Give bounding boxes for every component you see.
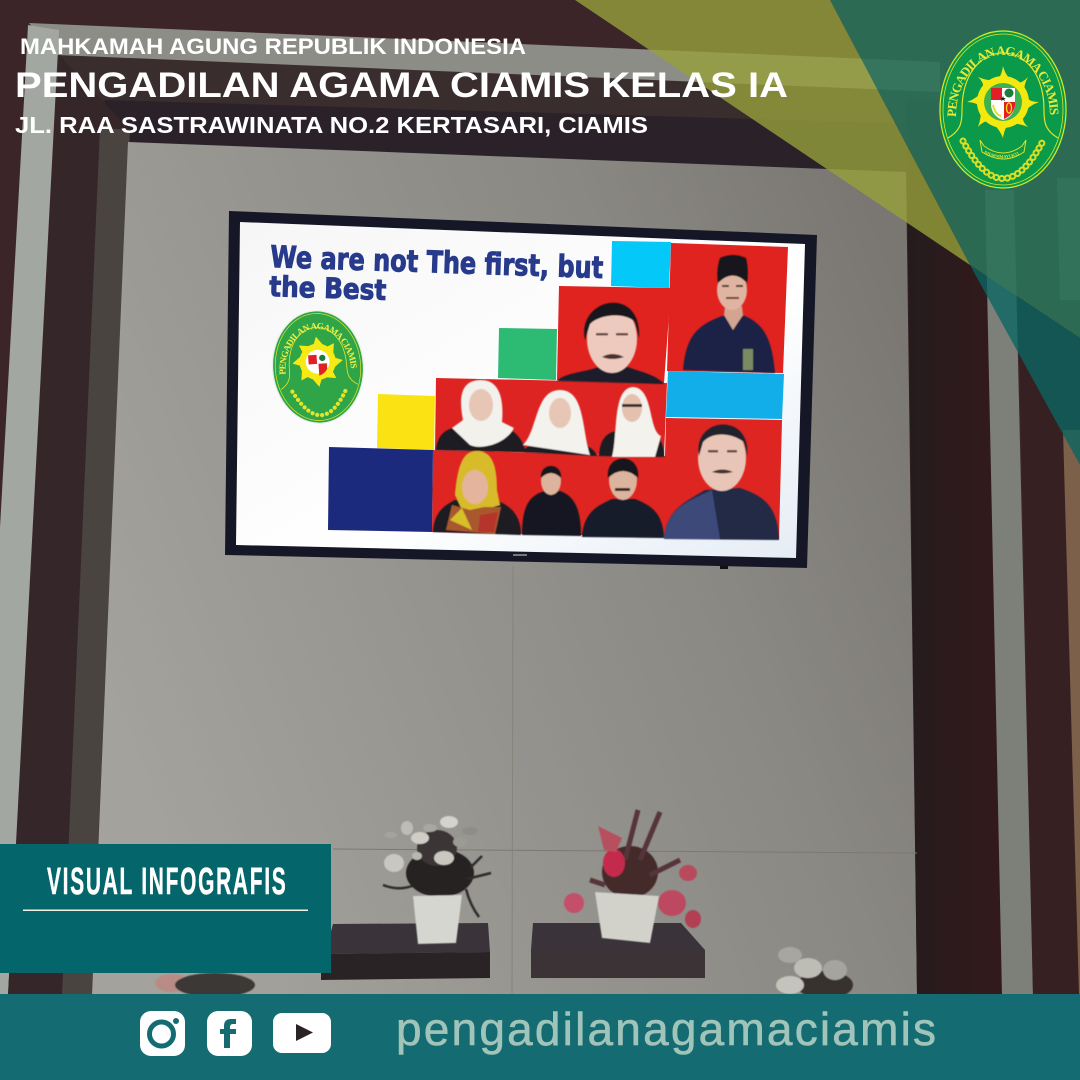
portrait: woman 3	[599, 387, 664, 457]
logo sun	[967, 66, 1039, 138]
portrait: man with cap	[683, 255, 775, 373]
icon: youtube	[273, 1013, 331, 1053]
plant: white flowers in pot on left shelf	[383, 816, 491, 944]
shelf left	[321, 923, 490, 980]
logo: Pengadilan Agama Ciamis: DHARMMAYUKTI	[984, 150, 1020, 158]
footer handle text: pengadilanagamaciamis	[396, 1003, 936, 1055]
slide heading: the Best	[269, 270, 387, 307]
header line 2: title: PENGADILAN AGAMA CIAMIS KELAS IA	[15, 66, 788, 105]
slide heading: We are not The first, but	[270, 240, 604, 286]
header line 1: MAHKAMAH AGUNG REPUBLIK INDONESIA	[20, 34, 526, 59]
portrait: woman in yellow hijab	[433, 451, 521, 535]
logo ribbon	[980, 140, 1026, 159]
icon: instagram	[140, 1011, 185, 1056]
colour blocks	[328, 241, 788, 539]
logo wreath	[963, 141, 1043, 178]
icon: facebook	[207, 1011, 252, 1056]
plant: flower bottom left	[155, 973, 255, 997]
logo: Pengadilan Agama Ciamis	[939, 30, 1067, 189]
portrait: man 2 row 3	[522, 466, 581, 536]
portrait: man 3 row 3	[582, 458, 664, 538]
shelf right	[531, 923, 705, 978]
panel heading: VISUAL INFOGRAFIS	[47, 861, 286, 903]
portrait: large man in blue shirt	[664, 424, 779, 540]
television	[225, 211, 817, 569]
header text	[15, 34, 788, 138]
plant: pink flowers in pot on right shelf	[564, 810, 701, 943]
logo on screen: PENGADILAN AGAMA CIAMIS	[279, 323, 357, 375]
portrait: woman 1	[436, 380, 526, 452]
plant: white flowers bottom right	[776, 947, 853, 999]
staff portraits	[433, 255, 779, 540]
logo on screen	[272, 310, 364, 424]
logo ring text: PENGADILAN AGAMA CIAMIS	[947, 46, 1058, 117]
portrait: woman 2	[523, 390, 597, 456]
slide heading	[269, 240, 604, 314]
header line 3: address: JL. RAA SASTRAWINATA NO.2 KERTASARI, CIAMIS	[15, 112, 648, 138]
panel: visual infografis	[0, 844, 331, 973]
olive triangle	[575, 0, 970, 265]
logo shield	[991, 88, 1015, 120]
teal triangle	[970, 265, 1080, 465]
footer bar	[0, 994, 1080, 1080]
portrait: large man	[557, 303, 664, 384]
green triangle	[830, 0, 1080, 338]
